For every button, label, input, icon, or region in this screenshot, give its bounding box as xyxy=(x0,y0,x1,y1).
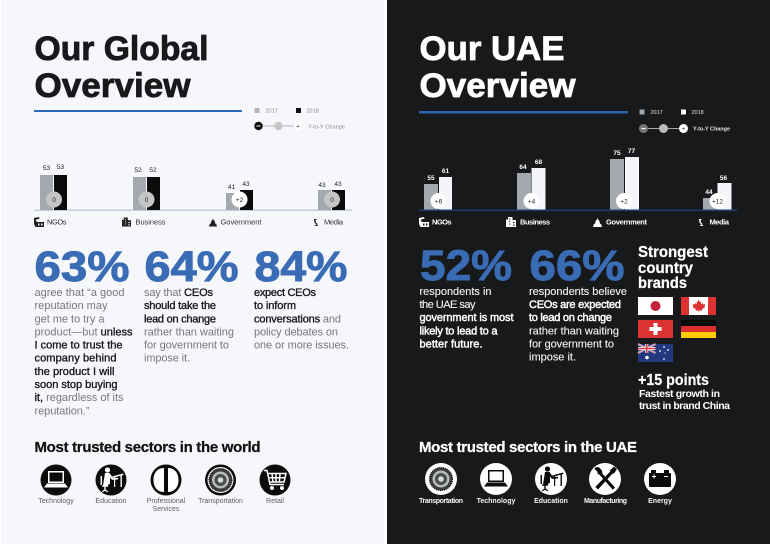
stat: 66% xyxy=(529,243,627,364)
stat: 63% xyxy=(34,244,133,417)
panel: global overview xyxy=(1,0,384,544)
legend: UAE: 2017 xyxy=(650,110,663,116)
bar chart: global trust: Business xyxy=(136,218,166,226)
stat: 52% xyxy=(420,243,514,350)
stat: 64%: say that CEOs xyxy=(144,287,214,299)
bar chart: UAE trust: +4 xyxy=(528,198,536,206)
sector icons: global: Services xyxy=(153,506,180,513)
stat: 63%: it, regardless of its xyxy=(34,392,124,404)
sector icons: UAE: Manufacturing xyxy=(584,498,627,505)
bar chart: global trust: 43 xyxy=(334,181,342,188)
title: Our Global Overview: Our Global xyxy=(34,30,208,68)
bar chart: UAE trust: NGOs xyxy=(432,218,452,226)
heading: most trusted sectors in the world: Most trusted sectors in the world xyxy=(34,439,260,456)
bar chart: UAE trust: 64 xyxy=(519,164,527,171)
heading: strongest country brands: brands xyxy=(638,275,687,292)
stat: 64%: rather than waiting xyxy=(144,326,234,338)
bar chart: global trust: Media xyxy=(324,218,344,226)
bar chart: UAE trust: 61 xyxy=(442,168,449,175)
stat: 63%: reputation.” xyxy=(34,405,90,417)
bar chart: UAE trust: +6 xyxy=(435,198,443,206)
sector icons: global xyxy=(38,464,290,513)
callout: +15 points xyxy=(638,372,730,412)
stat: 66%: impose it. xyxy=(529,352,576,364)
stat: 84% xyxy=(254,244,349,352)
flag: Australia xyxy=(638,344,673,362)
sector icons: global: Professional xyxy=(147,498,186,505)
stat: 64%: lead on change xyxy=(144,313,216,325)
stat: 63%: the product I will xyxy=(34,366,114,378)
title: Our UAE Overview: Our UAE xyxy=(420,30,564,68)
stat: 63%: I come to trust the xyxy=(34,340,122,352)
bar chart: global trust: Government xyxy=(220,218,262,226)
title: Our UAE Overview xyxy=(420,30,576,105)
bar chart: UAE trust: Government xyxy=(606,218,648,226)
stat: 66%: rather than waiting xyxy=(529,325,619,337)
stat: 52%: likely to lead to a xyxy=(420,325,498,337)
stat: 66%: 66% xyxy=(530,243,624,290)
heading: strongest country brands: Strongest xyxy=(638,244,708,261)
bar chart: global trust xyxy=(34,164,352,227)
stat: 52%: better future. xyxy=(420,338,482,350)
stat: 84%: 84% xyxy=(254,244,348,291)
bar chart: UAE trust: 75 xyxy=(613,150,621,157)
bar chart: global trust: 43 xyxy=(318,182,326,189)
bar chart: UAE trust: 68 xyxy=(535,159,542,166)
stat: 64%: impose it. xyxy=(144,353,190,365)
stat: 84%: conversations and xyxy=(254,313,341,325)
stat: 64%: 64% xyxy=(144,244,238,291)
stat: 84%: one or more issues. xyxy=(254,340,349,352)
stat: 64%: should take the xyxy=(144,300,216,312)
legend: UAE: + xyxy=(682,126,685,132)
legend: global: Y-to-Y Change xyxy=(308,124,345,130)
bar chart: UAE trust: +2 xyxy=(620,198,628,206)
stat: 63%: get me to try a xyxy=(34,313,105,325)
stat: 63%: reputation may xyxy=(34,300,108,312)
stat: 63%: 63% xyxy=(34,244,130,291)
stat: 66%: for government to xyxy=(529,338,614,350)
flag: Japan xyxy=(638,297,673,315)
stat: 84%: to inform xyxy=(254,300,296,312)
sector icons: global: Education xyxy=(95,498,127,505)
flag: Canada xyxy=(681,297,716,315)
bar chart: global trust: 53 xyxy=(43,165,50,172)
callout: +15 points: +15 points xyxy=(638,372,709,389)
legend: global: 2017 xyxy=(266,108,278,114)
bar chart: UAE trust xyxy=(419,148,737,227)
sector icons: global: Technology xyxy=(38,498,74,505)
bar chart: global trust: NGOs xyxy=(47,218,67,226)
stat: 66%: to lead on change xyxy=(529,312,612,324)
legend: UAE xyxy=(639,110,730,133)
heading: most trusted sectors in the UAE: Most trusted sectors in the UAE xyxy=(419,439,637,456)
stat: 64%: for government to xyxy=(144,340,229,352)
sector icons: UAE xyxy=(419,463,676,505)
bar chart: global trust: +2 xyxy=(236,197,244,204)
title: Our Global Overview: Overview xyxy=(34,67,191,105)
sector icons: global: Transportation xyxy=(198,498,243,505)
stat: 52%: government is most xyxy=(420,312,514,324)
stat: 84%: expect CEOs xyxy=(254,287,316,299)
bar chart: global trust: 43 xyxy=(242,181,250,188)
bar chart: global trust: 0 xyxy=(145,197,149,204)
bar chart: UAE trust: Media xyxy=(710,218,730,226)
bar chart: UAE trust: 77 xyxy=(628,148,635,155)
sector icons: UAE: Technology xyxy=(477,498,515,505)
stat: 84%: policy debates on xyxy=(254,326,338,338)
stat: 52%: respondents in xyxy=(420,286,492,298)
legend: global xyxy=(254,108,345,130)
bar chart: UAE trust: +12 xyxy=(712,198,723,206)
stat: 52%: 52% xyxy=(420,243,512,290)
bar chart: global trust: 52 xyxy=(134,167,142,174)
stat: 66%: respondents believe xyxy=(529,286,627,298)
stat: 63%: soon stop buying xyxy=(34,379,118,391)
bar chart: UAE trust: Business xyxy=(520,218,550,226)
flag: Germany xyxy=(681,320,716,338)
callout: +15 points: trust in brand China xyxy=(639,400,730,412)
stat: 52%: the UAE say xyxy=(420,299,476,311)
legend: global: 2018 xyxy=(306,108,319,114)
bar chart: global trust: 0 xyxy=(52,197,56,204)
flag: Switzerland xyxy=(638,320,673,338)
callout: +15 points: Fastest growth in xyxy=(639,388,720,400)
title: Our UAE Overview: Overview xyxy=(420,67,576,105)
heading: strongest country brands: country xyxy=(638,260,693,277)
heading: strongest country brands xyxy=(638,244,708,292)
bar chart: global trust: 41 xyxy=(228,184,235,191)
stat: 63%: product—but unless xyxy=(34,326,133,338)
sector icons: UAE: Transportation xyxy=(419,498,463,505)
legend: UAE: Y-to-Y Change xyxy=(693,126,730,132)
title: Our Global Overview xyxy=(34,30,208,105)
bar chart: global trust: 53 xyxy=(57,164,64,171)
bar chart: UAE trust: 55 xyxy=(427,175,435,182)
sector icons: UAE: Education xyxy=(534,498,568,505)
bar chart: UAE trust: 44 xyxy=(705,189,713,196)
stat: 63%: agree that “a good xyxy=(34,287,124,299)
legend: UAE: 2018 xyxy=(692,110,704,116)
legend: global: + xyxy=(296,124,300,130)
bar chart: UAE trust: 56 xyxy=(720,175,727,182)
stat: 64% xyxy=(144,244,238,365)
stat: 66%: CEOs are expected xyxy=(529,299,621,311)
panel: UAE overview xyxy=(387,0,770,544)
bar chart: global trust: 52 xyxy=(149,167,157,174)
sector icons: global: Retail xyxy=(266,498,284,505)
sector icons: UAE: Energy xyxy=(648,498,672,505)
stat: 63%: company behind xyxy=(34,353,116,365)
bar chart: global trust: 0 xyxy=(330,197,334,204)
